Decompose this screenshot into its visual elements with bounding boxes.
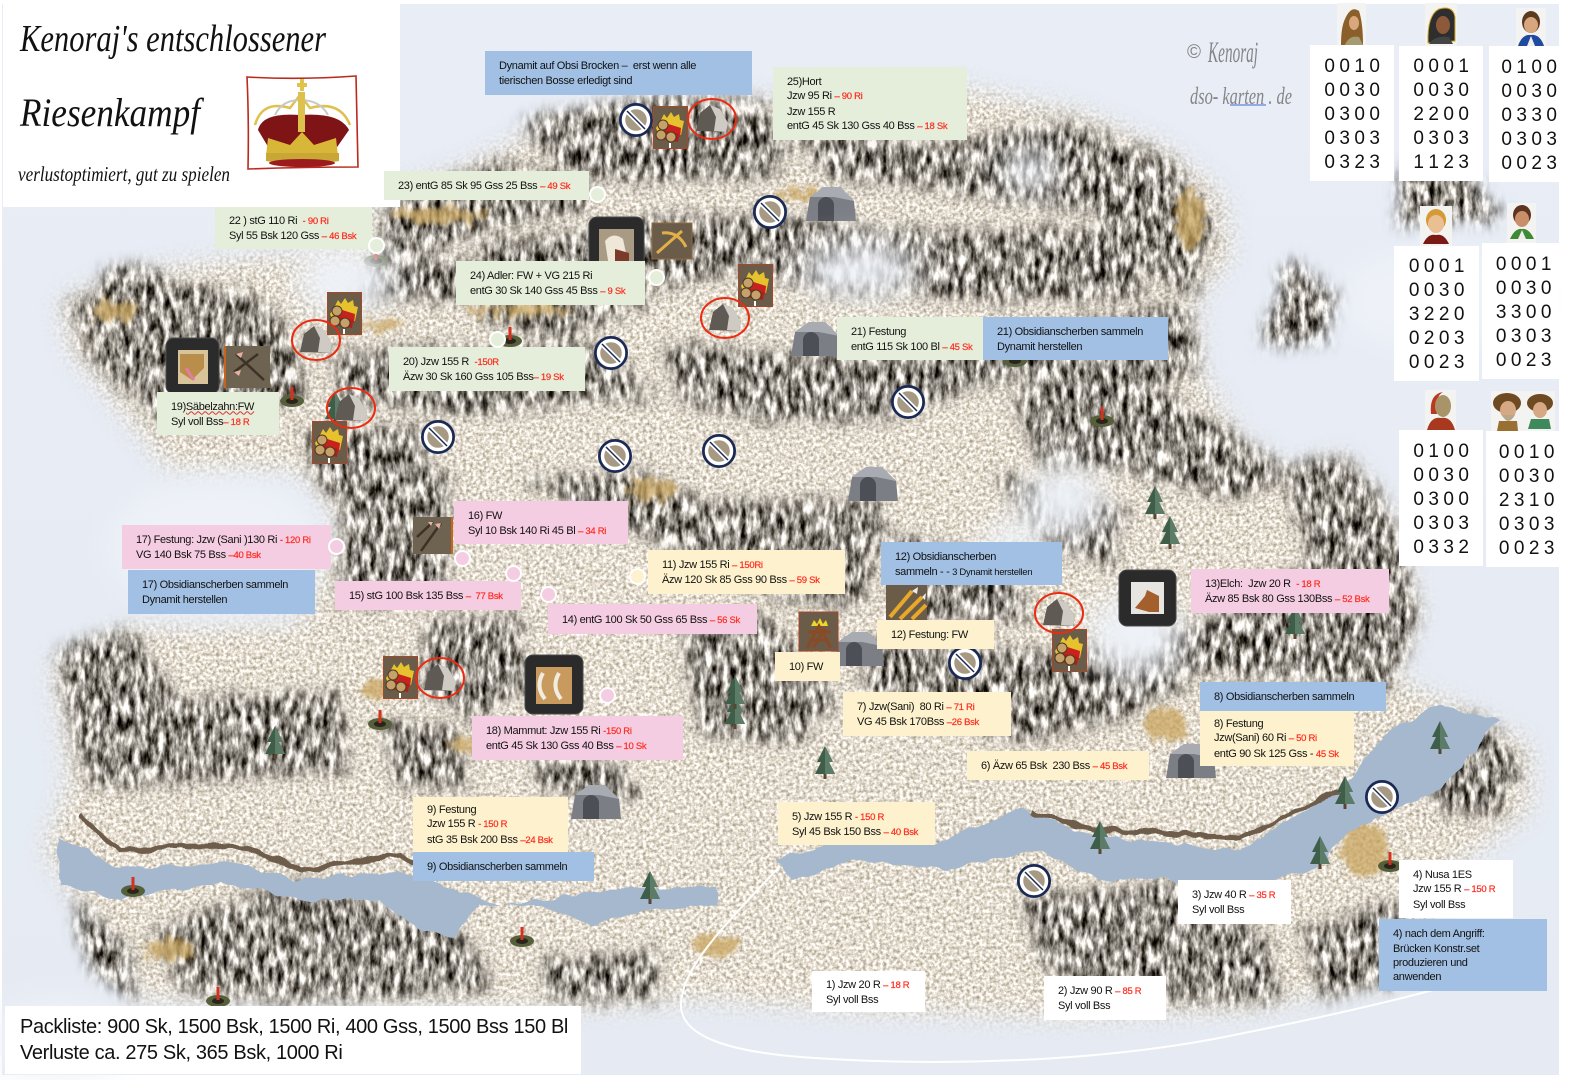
- step 6: [967, 751, 1149, 780]
- step 8 obsidian: 8) Obsidianscherben sammeln: [1214, 691, 1354, 703]
- step 10: [775, 652, 840, 681]
- step 23: [384, 171, 589, 200]
- step 10: 10) FW: [789, 661, 823, 673]
- step 18: entG 45 Sk 130 Gss 40 Bss – 10 Sk: [486, 740, 646, 752]
- loadout: portrait 6: [1425, 390, 1456, 430]
- step 2: Syl voll Bss: [1058, 1000, 1110, 1012]
- note: dynamite: Dynamit auf Obsi Brocken – erst wenn alle: [499, 60, 696, 72]
- step 1: [812, 971, 925, 1012]
- step 24: entG 30 Sk 140 Gss 45 Bss – 9 Sk: [470, 285, 625, 297]
- step 5: [778, 802, 935, 845]
- step 7: 7) Jzw(Sani) 80 Ri – 71 Ri: [857, 701, 974, 713]
- step 13: 13)Elch: Jzw 20 R - 18 R: [1205, 578, 1320, 590]
- step 23: 23) entG 85 Sk 95 Gss 25 Bss – 49 Sk: [398, 180, 570, 192]
- loadout: numbers 5: [1482, 243, 1559, 379]
- watermark signature: ©: [1187, 42, 1201, 63]
- step 9 obsidian: 9) Obsidianscherben sammeln: [427, 861, 567, 873]
- packing list: Packliste: 900 Sk, 1500 Bsk, 1500 Ri, 400 Gss, 1500 Bss 150 Bl: [20, 1016, 568, 1038]
- step 15: 15) stG 100 Bsk 135 Bss – 77 Bsk: [349, 590, 503, 602]
- step 8: Jzw(Sani) 60 Ri – 50 Ri: [1214, 732, 1317, 744]
- loadout: numbers 4: [1394, 246, 1479, 381]
- step 8 obsidian: [1200, 682, 1386, 711]
- step 4 note: 4) nach dem Angriff:: [1393, 928, 1485, 940]
- tan meadow patches: [89, 98, 1389, 961]
- step 8: 8) Festung: [1214, 718, 1263, 730]
- loadout: numbers 2: 0 0 0 1 0 0 3 0 2 2 0 0 0 3 0 3 1 1 2 3: [1413, 56, 1469, 173]
- step 22: [215, 207, 372, 249]
- step 3: Syl voll Bss: [1192, 904, 1244, 916]
- step 3: 3) Jzw 40 R – 35 R: [1192, 889, 1275, 901]
- step 24: 24) Adler: FW + VG 215 Ri: [470, 270, 592, 282]
- loadout: numbers 6: [1399, 430, 1483, 566]
- step 2: 2) Jzw 90 R – 85 R: [1058, 985, 1141, 997]
- step 4 note: produzieren und: [1393, 957, 1468, 969]
- mountain ridges: [60, 98, 1520, 1005]
- step 20: [389, 347, 585, 391]
- watermark signature: Kenoraj: [1207, 36, 1258, 69]
- step 19: 19)Säbelzahn:FW: [171, 400, 254, 412]
- marker dots pink: [328, 538, 616, 704]
- step 25: Jzw 95 Ri – 90 Ri: [787, 90, 862, 102]
- step 21: 21) Festung: [851, 326, 906, 338]
- step 8: entG 90 Sk 125 Gss - 45 Sk: [1214, 748, 1339, 760]
- step 17 obsidian: Dynamit herstellen: [142, 594, 227, 606]
- step 4: 4) Nusa 1ES: [1413, 869, 1472, 881]
- step 18: 18) Mammut: Jzw 155 Ri -150 Ri: [486, 725, 632, 737]
- icon: mammoth boss: [525, 655, 583, 714]
- step 9: Jzw 155 R - 150 R: [427, 818, 507, 830]
- icon: dynamite lower: [384, 656, 418, 698]
- loadout: numbers 3: [1489, 46, 1559, 182]
- step 4: Jzw 155 R – 150 R: [1413, 883, 1495, 895]
- step 12: [877, 620, 994, 649]
- step 5: 5) Jzw 155 R - 150 R: [792, 810, 884, 822]
- step 14: 14) entG 100 Sk 50 Gss 65 Bss – 56 Sk: [562, 614, 740, 626]
- no-entry markers: [422, 104, 1398, 896]
- bridge route line: [681, 866, 1459, 1062]
- step 11: 11) Jzw 155 Ri – 150Ri: [662, 559, 763, 571]
- step 21: entG 115 Sk 100 Bl – 45 Sk: [851, 340, 972, 352]
- step 13: [1191, 569, 1389, 613]
- note: dynamite: tierischen Bosse erledigt sind: [499, 75, 632, 87]
- step 2: [1044, 976, 1166, 1020]
- title text and crown: verlustoptimiert, gut zu spielen: [18, 162, 230, 186]
- title text and crown: Riesenkampf: [19, 90, 204, 135]
- step 18: [472, 716, 683, 760]
- step 25: 25)Hort: [787, 76, 821, 88]
- step 9: stG 35 Bsk 200 Bss –24 Bsk: [427, 834, 553, 846]
- step 21 obsidian: [983, 317, 1168, 360]
- icon: dynamite mid: [738, 264, 772, 306]
- step 19: Syl voll Bss– 18 R: [171, 416, 249, 428]
- loadout: numbers 1: [1310, 45, 1394, 181]
- icon: fire arrows tile: [886, 585, 927, 622]
- step 9: 9) Festung: [427, 804, 476, 816]
- loadout: numbers 3: 0 1 0 0 0 0 3 0 0 3 3 0 0 3 0 3 0 0 2 3: [1501, 56, 1557, 174]
- step 25: Jzw 155 R: [787, 106, 835, 118]
- step 20: 20) Jzw 155 R -150R: [403, 356, 499, 368]
- icon: dynamite left lower: [312, 422, 346, 464]
- step 21 obsidian: Dynamit herstellen: [997, 340, 1082, 352]
- loadout: portrait 5: [1507, 203, 1536, 243]
- note: dynamite: [485, 51, 752, 95]
- packing list: [5, 1006, 581, 1074]
- icon: arrows tile 19: [224, 346, 270, 388]
- loadout: portrait 3: [1516, 8, 1546, 46]
- step 24: [456, 261, 645, 305]
- step 22: Syl 55 Bsk 120 Gss – 46 Bsk: [229, 230, 356, 242]
- loadout: numbers 7: [1486, 431, 1559, 567]
- title text and crown: [18, 18, 359, 186]
- loadout: portrait 4: [1420, 206, 1452, 246]
- step 5: Syl 45 Bsk 150 Bss – 40 Bsk: [792, 826, 918, 838]
- step 4 note: anwenden: [1393, 971, 1441, 983]
- icon: dynamite right: [1052, 630, 1086, 672]
- step 22: 22 ) stG 110 Ri - 90 Ri: [229, 215, 329, 227]
- camps and forts: [121, 187, 1402, 1007]
- icon: sabertooth boss: [166, 338, 219, 394]
- step 4 note: Brücken Konstr.set: [1393, 943, 1479, 955]
- step 4: [1399, 860, 1513, 918]
- frozen river: [58, 705, 1500, 935]
- icon: dynamite top: [654, 106, 688, 148]
- icon: watchtower tile: [799, 612, 838, 651]
- step 19: [157, 392, 279, 435]
- step 1: 1) Jzw 20 R – 18 R: [826, 978, 909, 990]
- loadout: numbers 5: 0 0 0 1 0 0 3 0 3 3 0 0 0 3 0 3 0 0 2 3: [1496, 254, 1551, 370]
- step 9 obsidian: [413, 852, 594, 881]
- step 17: VG 140 Bsk 75 Bss –40 Bsk: [136, 549, 261, 561]
- loadout: portrait 2: [1425, 3, 1457, 46]
- icon: eagle boss: [589, 217, 644, 273]
- watermark signature: dso- karten . de: [1190, 84, 1292, 110]
- step 1: Syl voll Bss: [826, 994, 878, 1006]
- icon: elk boss: [1119, 570, 1176, 626]
- loadout: numbers 6: 0 1 0 0 0 0 3 0 0 3 0 0 0 3 0 3 0 3 3 2: [1413, 440, 1469, 558]
- decorative trees: [265, 391, 1450, 904]
- icon: arrows tile 16: [413, 517, 453, 554]
- step 17: 17) Festung: Jzw (Sani )130 Ri - 120 Ri: [136, 534, 311, 546]
- step 21: [837, 317, 983, 360]
- step 12: 12) Festung: FW: [891, 629, 968, 641]
- step 20: Äzw 30 Sk 160 Gss 105 Bss– 19 Sk: [403, 371, 564, 383]
- loadout: numbers 4: 0 0 0 1 0 0 3 0 3 2 2 0 0 2 0 3 0 0 2 3: [1409, 256, 1464, 373]
- step 21 obsidian: 21) Obsidianscherben sammeln: [997, 326, 1143, 338]
- step 17 obsidian: 17) Obsidianscherben sammeln: [142, 579, 288, 591]
- marker dot yellow: [629, 568, 646, 585]
- step 7: [843, 692, 1011, 736]
- step 3: [1178, 880, 1291, 924]
- loadout: numbers 2: [1399, 46, 1483, 181]
- packing list: Verluste ca. 275 Sk, 365 Bsk, 1000 Ri: [20, 1042, 342, 1064]
- step 4: Syl voll Bss: [1413, 899, 1465, 911]
- loadout: numbers 1: 0 0 1 0 0 0 3 0 0 3 0 0 0 3 0 3 0 3 2 3: [1324, 56, 1380, 172]
- step 13: Äzw 85 Bsk 80 Gss 130Bss – 52 Bsk: [1205, 593, 1370, 605]
- icon: crossbow tile: [652, 223, 692, 259]
- loadout: numbers 7: 0 0 1 0 0 0 3 0 2 3 1 0 0 3 0 3 0 0 2 3: [1499, 442, 1554, 558]
- step 15: [335, 581, 521, 610]
- step 25: entG 45 Sk 130 Gss 40 Bss – 18 Sk: [787, 120, 947, 132]
- step 12 obsidian: [881, 542, 1062, 585]
- step 17 obsidian: [128, 570, 315, 614]
- watermark signature: [1187, 36, 1292, 110]
- step 6: 6) Äzw 65 Bsk 230 Bss – 45 Bsk: [981, 760, 1127, 772]
- step 4 note: [1379, 919, 1547, 991]
- step 11: Äzw 120 Sk 85 Gss 90 Bss – 59 Sk: [662, 574, 820, 586]
- marker dots green: [368, 186, 665, 348]
- step 9: [413, 797, 568, 852]
- step 11: [648, 550, 845, 594]
- step 7: VG 45 Bsk 170Bss –26 Bsk: [857, 716, 979, 728]
- title panel: [3, 4, 400, 207]
- step 8: [1200, 711, 1354, 766]
- loadout: portraits 7: [1491, 391, 1555, 432]
- title text and crown: Kenoraj's entschlossener: [19, 18, 326, 60]
- step 16: 16) FW: [468, 510, 502, 522]
- step 16: [454, 501, 628, 544]
- step 14: [548, 604, 757, 634]
- step 17: [122, 525, 331, 569]
- step 12 obsidian: sammeln - - 3 Dynamit herstellen: [895, 566, 1032, 578]
- step 25: [773, 67, 967, 140]
- obsidian boulders: [300, 105, 1075, 691]
- icon: dynamite left upper: [328, 292, 362, 334]
- step 16: Syl 10 Bsk 140 Ri 45 Bl – 34 Ri: [468, 524, 606, 536]
- obsidian rock markers: [292, 99, 1083, 698]
- loadout: portrait 1: [1337, 3, 1366, 45]
- step 12 obsidian: 12) Obsidianscherben: [895, 550, 996, 562]
